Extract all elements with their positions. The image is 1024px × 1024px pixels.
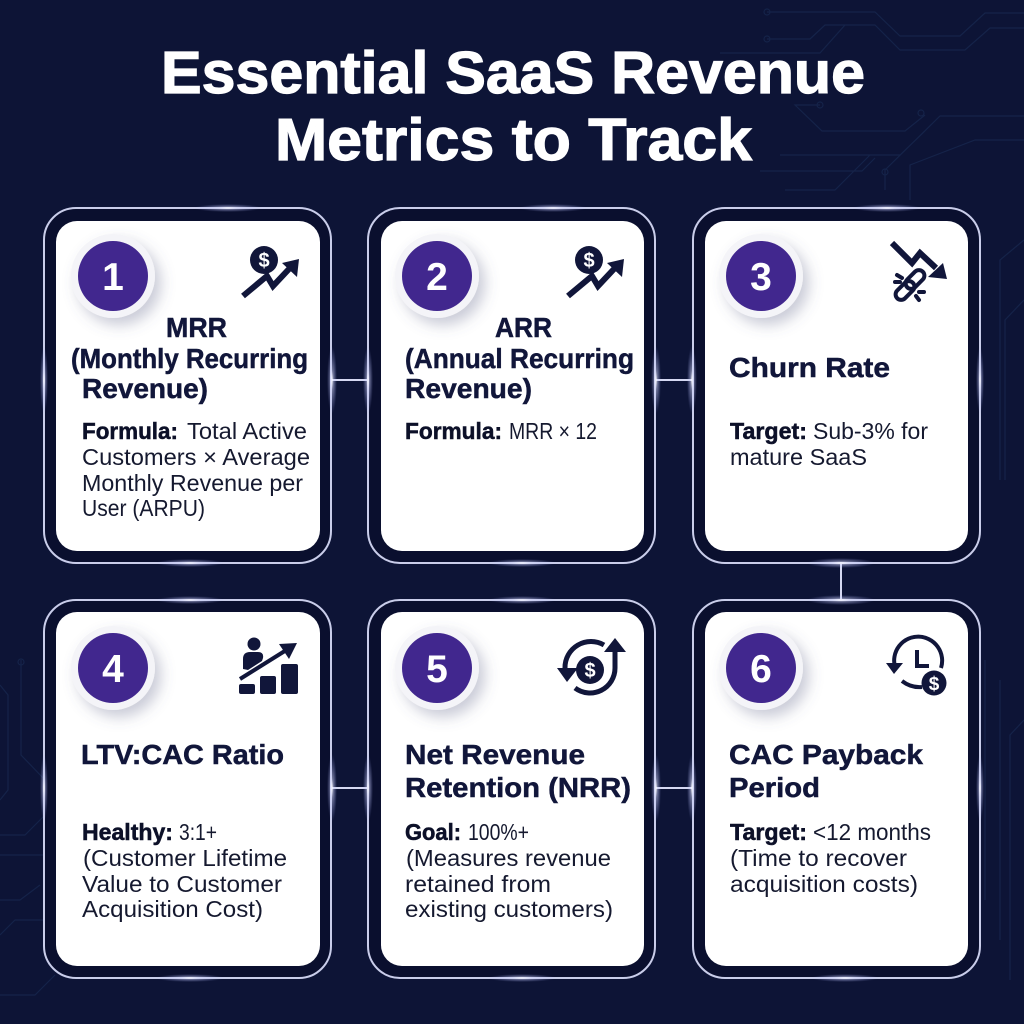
text: NRR description: 100%+ bbox=[468, 819, 529, 845]
heading: CAC Payback Period: CAC Payback bbox=[729, 739, 923, 770]
icon: coin and rising arrow: $ bbox=[258, 250, 270, 272]
text: NRR description: existing customers) bbox=[405, 896, 613, 922]
title bbox=[161, 40, 865, 173]
text: MRR formula: Formula: bbox=[82, 418, 178, 444]
heading: Churn Rate: Churn Rate bbox=[729, 352, 890, 383]
icon: clock with coin: $ bbox=[929, 674, 940, 695]
text: payback description: <12 months bbox=[813, 819, 931, 845]
text: NRR description bbox=[405, 819, 613, 922]
text: payback description: acquisition costs) bbox=[730, 871, 918, 897]
text: LTV:CAC description: 3:1+ bbox=[179, 819, 217, 845]
icon: coin and rising arrow bbox=[243, 246, 299, 296]
heading: Net Revenue Retention: Retention (NRR) bbox=[405, 772, 631, 803]
number badge 1: 1 bbox=[102, 256, 124, 299]
text: payback description: (Time to recover bbox=[730, 845, 907, 871]
text: churn target: mature SaaS bbox=[730, 444, 867, 470]
text: MRR formula: User (ARPU) bbox=[82, 495, 205, 521]
text: NRR description: retained from bbox=[405, 871, 551, 897]
text: MRR formula bbox=[82, 418, 310, 521]
number badge 3: 3 bbox=[750, 256, 772, 299]
text: churn target: Target: bbox=[730, 418, 807, 444]
heading: MRR: MRR bbox=[166, 312, 227, 343]
heading: ARR: Revenue) bbox=[405, 373, 532, 404]
heading: Net Revenue Retention: Net Revenue bbox=[405, 739, 585, 770]
heading: ARR: ARR bbox=[495, 312, 552, 343]
text: NRR description: Goal: bbox=[405, 819, 461, 845]
title: Essential SaaS Revenue bbox=[161, 40, 865, 106]
number badge 3 bbox=[719, 234, 803, 318]
icon: circular arrows around coin: $ bbox=[584, 660, 596, 682]
text: ARR formula: Formula: bbox=[405, 418, 502, 444]
text: payback description: Target: bbox=[730, 819, 807, 845]
panel: CAC Payback Period bbox=[693, 600, 980, 978]
heading: MRR: Revenue) bbox=[82, 373, 208, 404]
title: Metrics to Track bbox=[275, 107, 752, 173]
panel: MRR bbox=[44, 208, 331, 563]
heading: LTV:CAC Ratio: LTV:CAC Ratio bbox=[81, 739, 284, 770]
heading: ARR bbox=[405, 312, 634, 404]
heading: CAC Payback Period bbox=[729, 739, 923, 803]
text: MRR formula: Total Active bbox=[187, 418, 307, 444]
connectors between cards bbox=[332, 380, 841, 788]
text: ARR formula: MRR × 12 bbox=[509, 418, 597, 444]
icon: clock with coin bbox=[886, 637, 946, 696]
text: churn target: Sub-3% for bbox=[813, 418, 928, 444]
text: payback description bbox=[730, 819, 931, 897]
number badge 2 bbox=[395, 234, 479, 318]
panel: Churn Rate bbox=[693, 208, 980, 563]
panel: Net Revenue Retention bbox=[368, 600, 655, 978]
text: churn target bbox=[730, 418, 928, 470]
heading: CAC Payback Period: Period bbox=[729, 772, 820, 803]
heading: ARR: (Annual Recurring bbox=[405, 343, 634, 374]
number badge 2: 2 bbox=[426, 256, 448, 299]
text: LTV:CAC description bbox=[82, 819, 287, 922]
text: ARR formula bbox=[405, 418, 597, 444]
icon: person, bars and rising arrow bbox=[239, 638, 298, 694]
heading: MRR bbox=[71, 312, 308, 404]
number badge 1 bbox=[71, 234, 155, 318]
text: NRR description: (Measures revenue bbox=[406, 845, 611, 871]
text: LTV:CAC description: Acquisition Cost) bbox=[82, 896, 263, 922]
icon: coin and rising arrow: $ bbox=[583, 250, 595, 272]
icon: falling arrow and broken chain bbox=[892, 243, 947, 302]
panel: LTV:CAC Ratio bbox=[44, 600, 331, 978]
number badge 6 bbox=[719, 626, 803, 710]
number badge 4: 4 bbox=[102, 648, 124, 691]
heading: MRR: (Monthly Recurring bbox=[71, 343, 308, 374]
panel: ARR bbox=[368, 208, 655, 563]
text: LTV:CAC description: (Customer Lifetime bbox=[83, 845, 287, 871]
text: MRR formula: Customers × Average bbox=[82, 444, 310, 470]
text: MRR formula: Monthly Revenue per bbox=[82, 470, 303, 496]
text: LTV:CAC description: Value to Customer bbox=[82, 871, 282, 897]
number badge 6: 6 bbox=[750, 648, 772, 691]
number badge 5 bbox=[395, 626, 479, 710]
icon: coin and rising arrow bbox=[568, 246, 624, 296]
icon: circular arrows around coin bbox=[557, 638, 626, 693]
number badge 5: 5 bbox=[426, 648, 448, 691]
heading: Net Revenue Retention bbox=[405, 739, 631, 803]
number badge 4 bbox=[71, 626, 155, 710]
text: LTV:CAC description: Healthy: bbox=[82, 819, 173, 845]
